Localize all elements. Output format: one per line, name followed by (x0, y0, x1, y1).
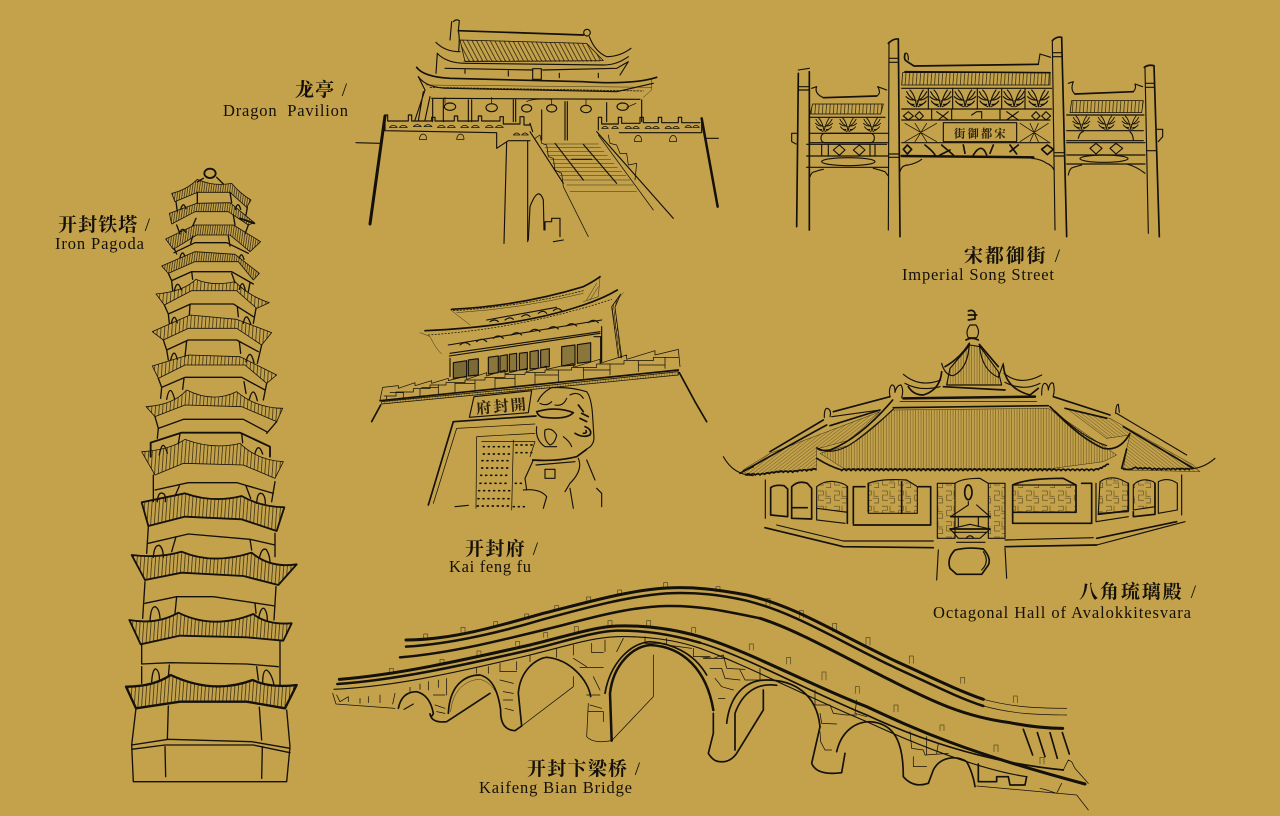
right span (1067, 82, 1145, 175)
left span (807, 87, 888, 177)
illustration: dragon pavilion (356, 20, 718, 243)
pillars (792, 37, 1163, 237)
label: kaifeng fu: 开封府 / (465, 538, 539, 560)
lower railing (334, 626, 1085, 784)
finial and upper roof (893, 310, 1048, 408)
stone lion (523, 387, 602, 508)
hall columns and lanterns (415, 77, 642, 140)
label: octagonal hall (933, 581, 1197, 622)
illustration: bian bridge (333, 583, 1088, 810)
incense burner (949, 502, 990, 574)
lower roof (417, 67, 657, 97)
masonry stones (333, 637, 948, 767)
side roofs (723, 397, 1215, 476)
label: dragon pavilion (223, 78, 348, 120)
bridge end and steps (977, 729, 1088, 810)
hall windows (449, 333, 600, 378)
label: bian bridge: Kaifeng Bian Bridge (479, 778, 632, 797)
plaque inscription: 街御都宋 (954, 126, 1006, 140)
lower roof (420, 290, 623, 363)
central span (900, 53, 1054, 172)
label: iron pagoda: 开封铁塔 / (58, 214, 151, 236)
name plaque (469, 391, 532, 418)
label: octagonal hall: Octagonal Hall of Avalokkitesvara (933, 603, 1192, 622)
railing posts (389, 583, 1044, 764)
upper railing (400, 588, 1067, 728)
label: octagonal hall: 八角琉璃殿 / (1079, 581, 1197, 603)
label: kaifeng fu: Kai feng fu (449, 557, 531, 576)
crenellated walls (356, 115, 718, 224)
stone platform (765, 522, 1185, 580)
gate door (428, 416, 536, 510)
illustration: octagonal hall (723, 310, 1215, 580)
hall facade and lattice windows (765, 475, 1182, 538)
label: imperial song street: 宋都御街 / (964, 244, 1061, 267)
upper roof (436, 20, 631, 79)
pagoda lower tiers and base (126, 475, 297, 782)
crenellated rampart (372, 349, 707, 422)
illustration: iron pagoda (126, 169, 297, 782)
label: bian bridge (479, 757, 641, 797)
central stairway and gate (497, 132, 673, 243)
label: imperial song street (902, 244, 1061, 284)
illustration: imperial song street gate (792, 37, 1163, 237)
name plaque: 府封開 (475, 396, 527, 418)
arches (398, 642, 975, 787)
label: dragon pavilion: Dragon Pavilion (223, 101, 348, 120)
label: dragon pavilion: 龙亭 / (295, 78, 348, 101)
label: iron pagoda: Iron Pagoda (55, 234, 145, 253)
upper roof (450, 277, 600, 325)
label: kaifeng fu (449, 538, 539, 576)
label: bian bridge: 开封卞梁桥 / (527, 757, 641, 780)
label: iron pagoda (55, 214, 151, 253)
pagoda upper tiers (142, 169, 283, 478)
main hall roof (817, 383, 1130, 471)
label: imperial song street: Imperial Song Street (902, 265, 1054, 284)
illustration: kaifeng fu (372, 277, 707, 510)
